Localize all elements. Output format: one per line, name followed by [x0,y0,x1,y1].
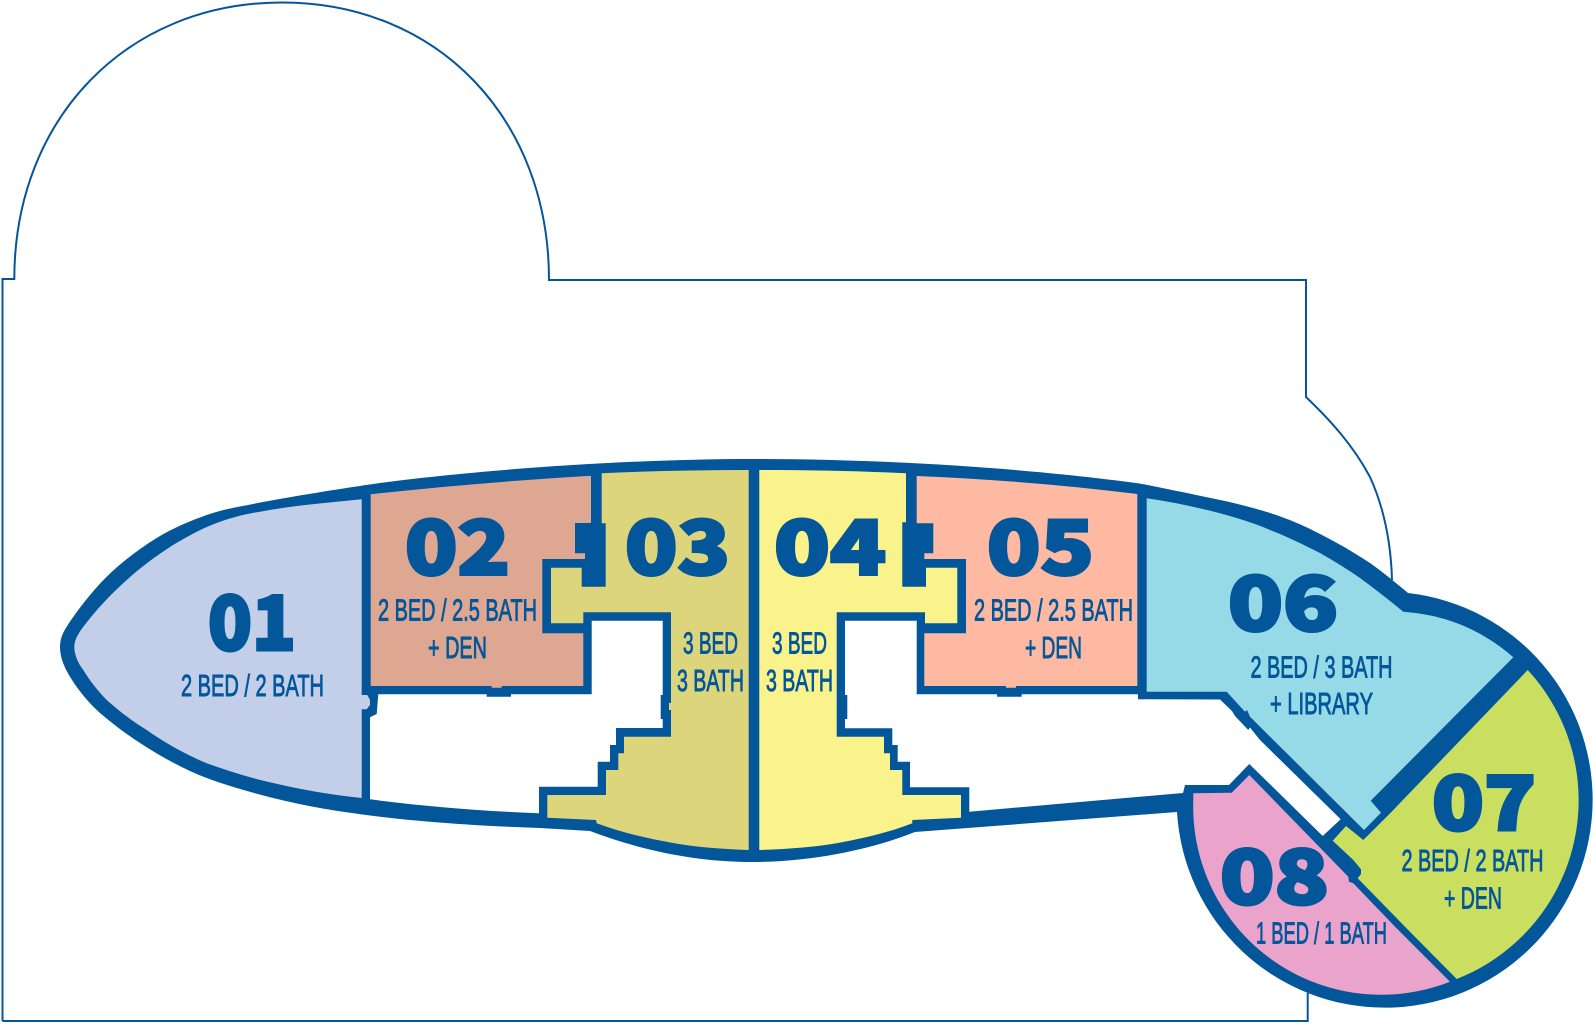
room 05 [917,476,1137,688]
room 04: 3 BATH [766,663,833,698]
room 03: 03 [625,488,730,596]
room 07 [1333,670,1579,979]
room 01 [74,499,370,798]
room 01: 01 [208,563,296,672]
room 05: 2 BED / 2.5 BATH [974,593,1133,628]
room 04 [759,470,961,850]
room 07: + DEN [1444,880,1502,915]
room 02: + DEN [428,630,487,665]
room 08: 1 BED / 1 BATH [1256,915,1387,950]
room 05: + DEN [1025,630,1082,665]
room 04: 3 BED [772,625,827,660]
room 08: 08 [1220,817,1329,926]
room 02: 02 [405,488,510,596]
room 03: 3 BATH [677,663,744,698]
room 02 [371,476,591,688]
room 06: 06 [1228,544,1338,652]
room 03: 3 BED [683,625,738,660]
room 05: 05 [987,488,1094,596]
room 03 [547,470,749,850]
room 06: + LIBRARY [1270,686,1373,721]
right courtyard [845,621,1341,836]
room 02: 2 BED / 2.5 BATH [378,593,537,628]
room 07: 07 [1432,743,1536,852]
room 06: 2 BED / 3 BATH [1250,649,1392,684]
room 06 [1147,498,1513,830]
room 04: 04 [774,488,886,596]
building outer wall silhouette [60,459,1593,1008]
room 08 [1193,775,1450,995]
left courtyard [370,621,663,813]
room 01: 2 BED / 2 BATH [181,668,324,703]
